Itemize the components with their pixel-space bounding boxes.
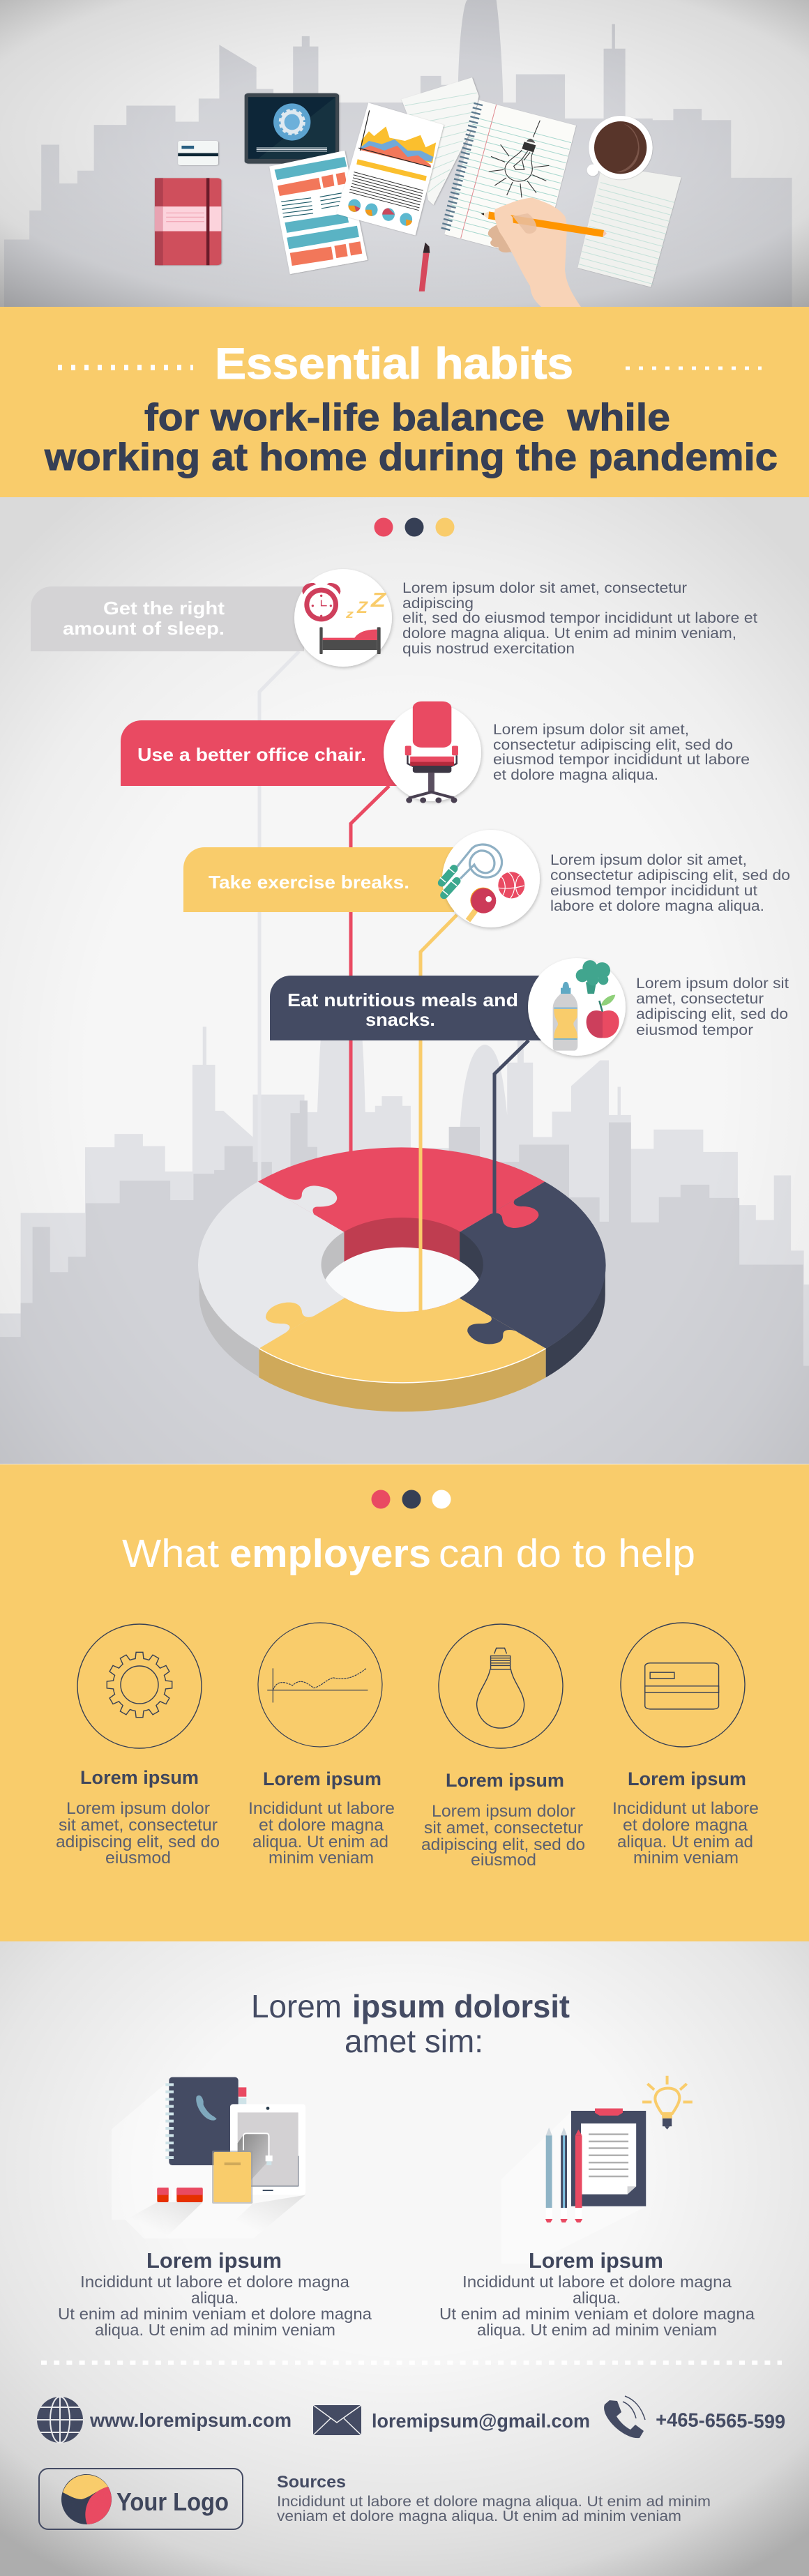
label text [63,598,225,639]
item 4 text [612,1768,759,1867]
panel: header desk scene [0,0,809,308]
heading [251,1988,570,2059]
header skyline [4,0,792,308]
icon: back lined sheet [402,77,479,205]
label bar [270,976,542,1040]
icon: notebook, tablet and phone [112,2077,305,2238]
icon circle [528,958,626,1056]
sources [277,2473,711,2524]
subtitle line 1: for work-life balance while [144,395,670,439]
heading: ipsum dolorsit [352,1988,570,2024]
heading: amet sim: [345,2023,483,2059]
icon: phone [604,2396,645,2438]
icon: tablet with gear [245,93,339,164]
connector: red [351,786,389,1154]
description [402,579,757,657]
label text: Eat nutritious meals and [287,990,518,1010]
right column text [439,2248,755,2339]
icon: zzz: z [345,607,354,621]
description: labore et dolore magna aliqua. [550,897,764,914]
description: quis nostrud exercitation [402,640,575,657]
puzzle piece: grey [198,1182,344,1349]
description [636,975,789,1038]
icon circle [294,569,392,667]
description: adipiscing [402,595,474,612]
heading: employers [229,1531,431,1576]
habit 4: nutrition [270,958,789,1056]
right column text: Ut enim ad minim veniam et dolore magna [439,2305,755,2323]
item 3 text [421,1770,585,1870]
left column text: aliqua. Ut enim ad minim veniam [95,2321,335,2339]
puzzle side walls [199,1265,605,1411]
icon: zzz: Z [356,598,368,617]
phone number: +465-6565-599 [656,2409,785,2432]
description [493,721,750,783]
icon: card in circle [621,1623,745,1747]
icon: globe [37,2397,83,2443]
panel: employers [0,1464,809,1941]
sources: Sources [277,2473,346,2492]
description: Lorem ipsum dolor sit [636,975,789,992]
item 2 text: aliqua. Ut enim ad [252,1833,388,1851]
panel: title banner [0,307,809,497]
icon: hand holding pencil [481,197,607,308]
puzzle knob: dark into yellow [460,1298,546,1349]
description: eiusmod tempor incididunt ut labore [493,751,750,768]
section dots [374,517,455,537]
icon: bank card [178,141,218,165]
decorative dotted rule right [626,367,762,370]
heading: can do to help [439,1531,695,1576]
sources: veniam et dolore magna aliqua. Ut enim ad minim veniam [277,2508,681,2524]
item 2 text: et dolore magna [259,1816,384,1835]
item 2 text: Incididunt ut labore [248,1799,395,1818]
sources: Incididunt ut labore et dolore magna aliqua. Ut enim ad minim [277,2494,711,2510]
subtitle line 2: working at home during the pandemic [44,435,778,478]
description: Lorem ipsum dolor sit amet, [550,851,747,868]
item 2 text [248,1768,395,1867]
right column text: Incididunt ut labore et dolore magna [462,2273,732,2291]
puzzle knob: red into dark [460,1182,545,1232]
label text: Get the right [103,598,225,619]
connector: dark [494,1040,529,1214]
left column text [58,2248,372,2339]
website: www.loremipsum.com [89,2409,292,2431]
item 3 text: sit amet, consectetur [424,1819,583,1838]
left column text: Ut enim ad minim veniam et dolore magna [58,2305,372,2323]
icon: teal report sheet [269,151,368,274]
item 3 text: eiusmod [471,1851,536,1870]
item 1 text: sit amet, consectetur [59,1816,218,1835]
label text [287,990,518,1030]
item 4 text: et dolore magna [623,1816,748,1835]
puzzle knob: grey into red [258,1182,344,1232]
description: et dolore magna aliqua. [493,766,658,783]
desk objects [155,77,681,308]
heading: Lorem [251,1988,342,2024]
item 4 text: aliqua. Ut enim ad [617,1833,753,1851]
email: loremipsum@gmail.com [372,2410,590,2432]
icon: red notebook [155,178,221,265]
icon: spiral notebook with bulb sketch [444,100,576,260]
puzzle knob: yellow into grey [259,1298,344,1349]
item 1 text: Lorem ipsum [80,1767,199,1788]
description: consectetur adipiscing elit, sed do [493,736,733,753]
icon: chart sheet [336,103,444,236]
icon: chart in circle [258,1623,382,1747]
label text: Take exercise breaks. [209,872,409,893]
icon: rope, ball and paddle [440,844,524,920]
section dots [371,1490,451,1509]
left column text: aliqua. [191,2289,239,2307]
description: amet, consectetur [636,990,764,1007]
description: eiusmod tempor incididunt ut [550,882,757,899]
panel: habits [0,497,809,1464]
item 3 text: Lorem ipsum [446,1770,564,1791]
description [550,851,790,914]
description: consectetur adipiscing elit, sed do [550,867,790,884]
icon: clipboard, pencils and bulb [501,2076,693,2264]
item 2 text: Lorem ipsum [263,1768,381,1789]
item 2 text: minim veniam [269,1849,374,1867]
heading [122,1531,695,1576]
icon circle [442,830,540,927]
left column text: Incididunt ut labore et dolore magna [80,2273,349,2291]
left column text: Lorem ipsum [146,2248,282,2273]
item 4 text: minim veniam [633,1849,739,1867]
logo box [39,2469,243,2529]
habit 3: exercise [183,830,790,927]
puzzle highlight [259,1349,546,1383]
description: eiusmod tempor [636,1022,753,1038]
label bar [121,720,398,786]
item 4 text: Lorem ipsum [628,1768,746,1789]
icon: envelope [313,2405,361,2435]
right column text: Lorem ipsum [529,2248,663,2273]
puzzle piece: red [258,1147,545,1232]
label text: snacks. [365,1009,435,1030]
label text: Use a better office chair. [137,744,366,765]
item 3 text: Lorem ipsum dolor [432,1802,575,1821]
icon: zzz: Z [370,589,387,612]
habit 2: chair [121,702,750,803]
icon: zzz [345,589,387,621]
icon: office chair [405,702,458,803]
label bar [31,586,304,651]
icon: pen [419,243,430,291]
panel: bottom info [0,1941,809,2576]
decorative dotted rule left [58,365,193,370]
icon: gear in circle [77,1624,202,1748]
description: dolore magna aliqua. Ut enim ad minim veniam, [402,625,736,642]
icon: alarm clock and bed [302,583,381,654]
right column text: aliqua. [573,2289,621,2307]
right column text: aliqua. Ut enim ad minim veniam [477,2321,717,2339]
connector: grey [259,651,299,1185]
puzzle piece: yellow [259,1298,546,1383]
description: adipiscing elit, sed do [636,1006,788,1022]
habit 1: sleep [31,569,757,667]
icon: coffee cup [587,116,653,179]
label bar [183,847,454,912]
icon: bottle, broccoli and apple [553,960,619,1051]
icon: right lined sheet [577,165,681,287]
decorative divider [41,2361,782,2365]
label text: amount of sleep. [63,618,225,639]
description: elit, sed do eiusmod tempor incididunt ut labore et [402,609,757,626]
icon: bulb in circle [439,1624,563,1748]
puzzle hole [321,1218,483,1312]
item 1 text [56,1767,220,1867]
icon circle [384,704,481,801]
item 1 text: Lorem ipsum dolor [66,1799,210,1818]
puzzle piece: dark [460,1182,606,1349]
item 1 text: adipiscing elit, sed do [56,1833,220,1851]
title: essential habits: Essential habits [215,340,573,388]
connector: yellow [421,915,457,1311]
icon: logo mark [61,2474,112,2524]
logo text: Your Logo [116,2487,229,2516]
item 4 text: Incididunt ut labore [612,1799,759,1818]
item 1 text: eiusmod [105,1849,171,1867]
puzzle ring [198,1147,606,1411]
heading: What [122,1531,219,1576]
description: Lorem ipsum dolor sit amet, consectetur [402,579,687,596]
skyline behind puzzle [0,1026,809,1464]
description: Lorem ipsum dolor sit amet, [493,721,689,738]
item 3 text: adipiscing elit, sed do [421,1835,585,1854]
